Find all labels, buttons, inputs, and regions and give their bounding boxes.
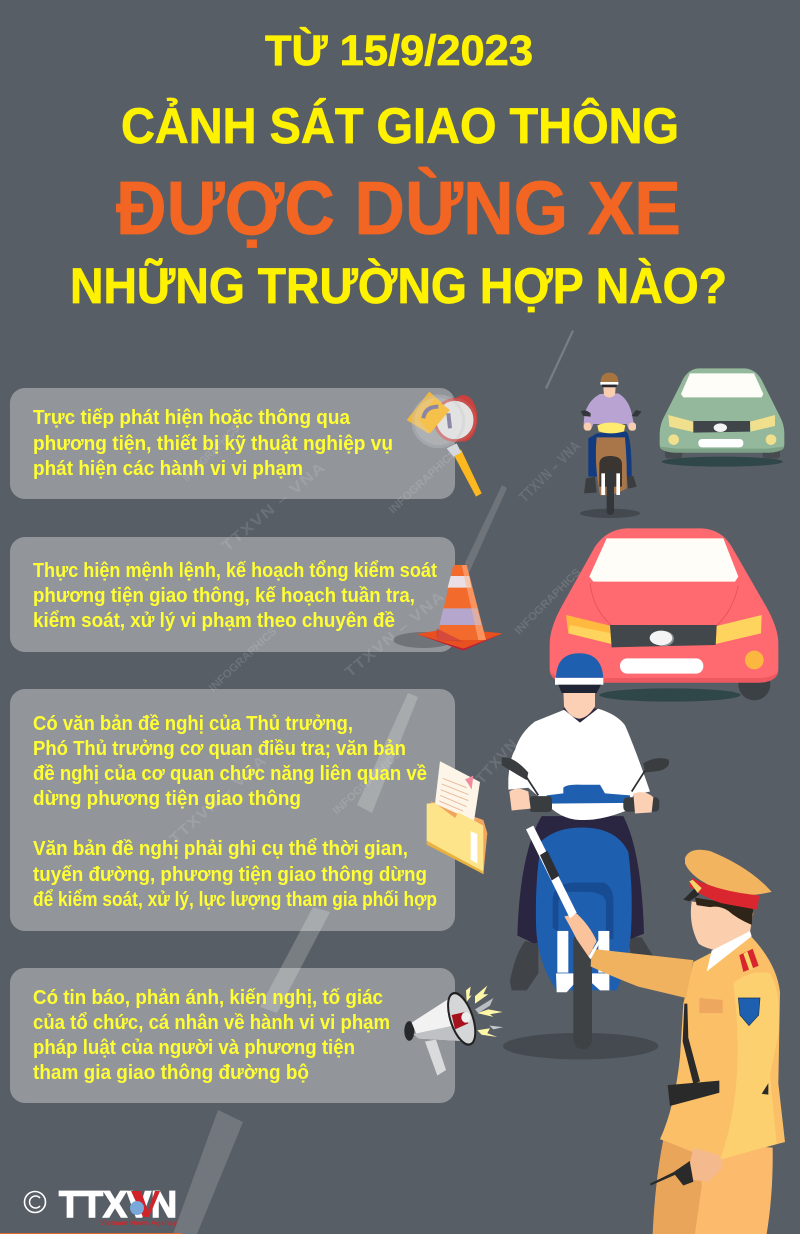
logo: copyright mark and TTXVN: Vietnam News Agency: [100, 1221, 178, 1227]
watermarks: INFOGRAPHICS: [513, 566, 583, 637]
title: ĐƯỢC DỪNG XE: [116, 166, 681, 250]
watermarks: INFOGRAPHICS: [181, 423, 242, 484]
panel text: case 4: tham gia giao thông đường bộ: [33, 1062, 309, 1084]
illustration: red car: [550, 528, 778, 702]
panel text: case 2: Thực hiện mệnh lệnh, kế hoạch tổng kiểm soát: [33, 560, 437, 582]
icon: magnifier with road signs: [407, 392, 482, 497]
panel text: case 1: phát hiện các hành vi vi phạm: [33, 458, 303, 480]
watermarks: TTXVN: [472, 735, 522, 788]
panel text: case 4: pháp luật của người và phương tiện: [33, 1037, 355, 1059]
watermarks: TTXVN – VNA: [516, 437, 584, 506]
panel text: case 2: phương tiện giao thông, kế hoạch tuần tra,: [33, 585, 415, 607]
watermarks: TTXVN – VNA: [219, 458, 329, 555]
watermarks: INFOGRAPHICS: [387, 447, 459, 516]
scene coordinates top: [393, 368, 784, 702]
watermarks: INFOGRAPHICS: [207, 625, 279, 694]
title: CẢNH SÁT GIAO THÔNG: [121, 97, 679, 154]
watermarks: INFOGRAPHICS: [331, 748, 403, 817]
panel text: case 3: để kiểm soát, xử lý, lực lượng tham gia phối hợp: [33, 889, 437, 911]
watermarks: TTXVN – VNA: [342, 588, 448, 681]
panel text: case 4: [33, 987, 390, 1084]
panel text: case 3: dừng phương tiện giao thông: [33, 788, 301, 810]
scene coordinates lower: [404, 653, 785, 1234]
watermarks: [166, 423, 584, 848]
panel: case 2: [10, 537, 455, 652]
panel text: case 1: [33, 407, 393, 480]
title: NHỮNG TRƯỜNG HỢP NÀO?: [70, 257, 727, 314]
watermarks: TTXVN – VNA: [166, 752, 271, 848]
panel text: case 2: kiểm soát, xử lý vi phạm theo chuyên đề: [33, 610, 395, 632]
panel: case 4: [10, 968, 455, 1103]
panel text: case 1: phương tiện, thiết bị kỹ thuật nghiệp vụ: [33, 433, 393, 455]
title: [70, 26, 727, 314]
icon: copyright: [24, 1192, 46, 1212]
panel text: case 2: [33, 560, 437, 632]
logo: copyright mark and TTXVN: TTXVN: [59, 1184, 177, 1225]
icon: megaphone: [404, 985, 503, 1076]
panel text: case 3: [33, 713, 437, 911]
panel text: case 1: Trực tiếp phát hiện hoặc thông qua: [33, 407, 351, 429]
panel text: case 3: tuyến đường, phương tiện giao thông dừng: [33, 864, 427, 886]
illustration: traffic police officer: [526, 826, 785, 1234]
illustration: small motorbike rider: [580, 373, 642, 518]
illustration: main motorbike rider: [502, 653, 669, 1059]
icon: traffic cone: [393, 565, 503, 651]
panel: case 1: [10, 388, 455, 499]
panel text: case 3: Văn bản đề nghị phải ghi cụ thể thời gian,: [33, 838, 408, 860]
panel text: case 3: đề nghị của cơ quan chức năng liên quan về: [33, 763, 427, 785]
illustration: green car: [660, 368, 784, 467]
panel text: case 4: của tổ chức, cá nhân về hành vi vi phạm: [33, 1012, 390, 1034]
title line: date: TỪ 15/9/2023: [265, 26, 533, 75]
panel text: case 3: Có văn bản đề nghị của Thủ trưởng,: [33, 713, 353, 735]
panel text: case 4: Có tin báo, phản ánh, kiến nghị, tố giác: [33, 987, 383, 1009]
panel: case 3: [10, 689, 455, 931]
icon: folder with document: [427, 761, 487, 874]
panel text: case 3: Phó Thủ trưởng cơ quan điều tra; văn bản: [33, 738, 406, 760]
